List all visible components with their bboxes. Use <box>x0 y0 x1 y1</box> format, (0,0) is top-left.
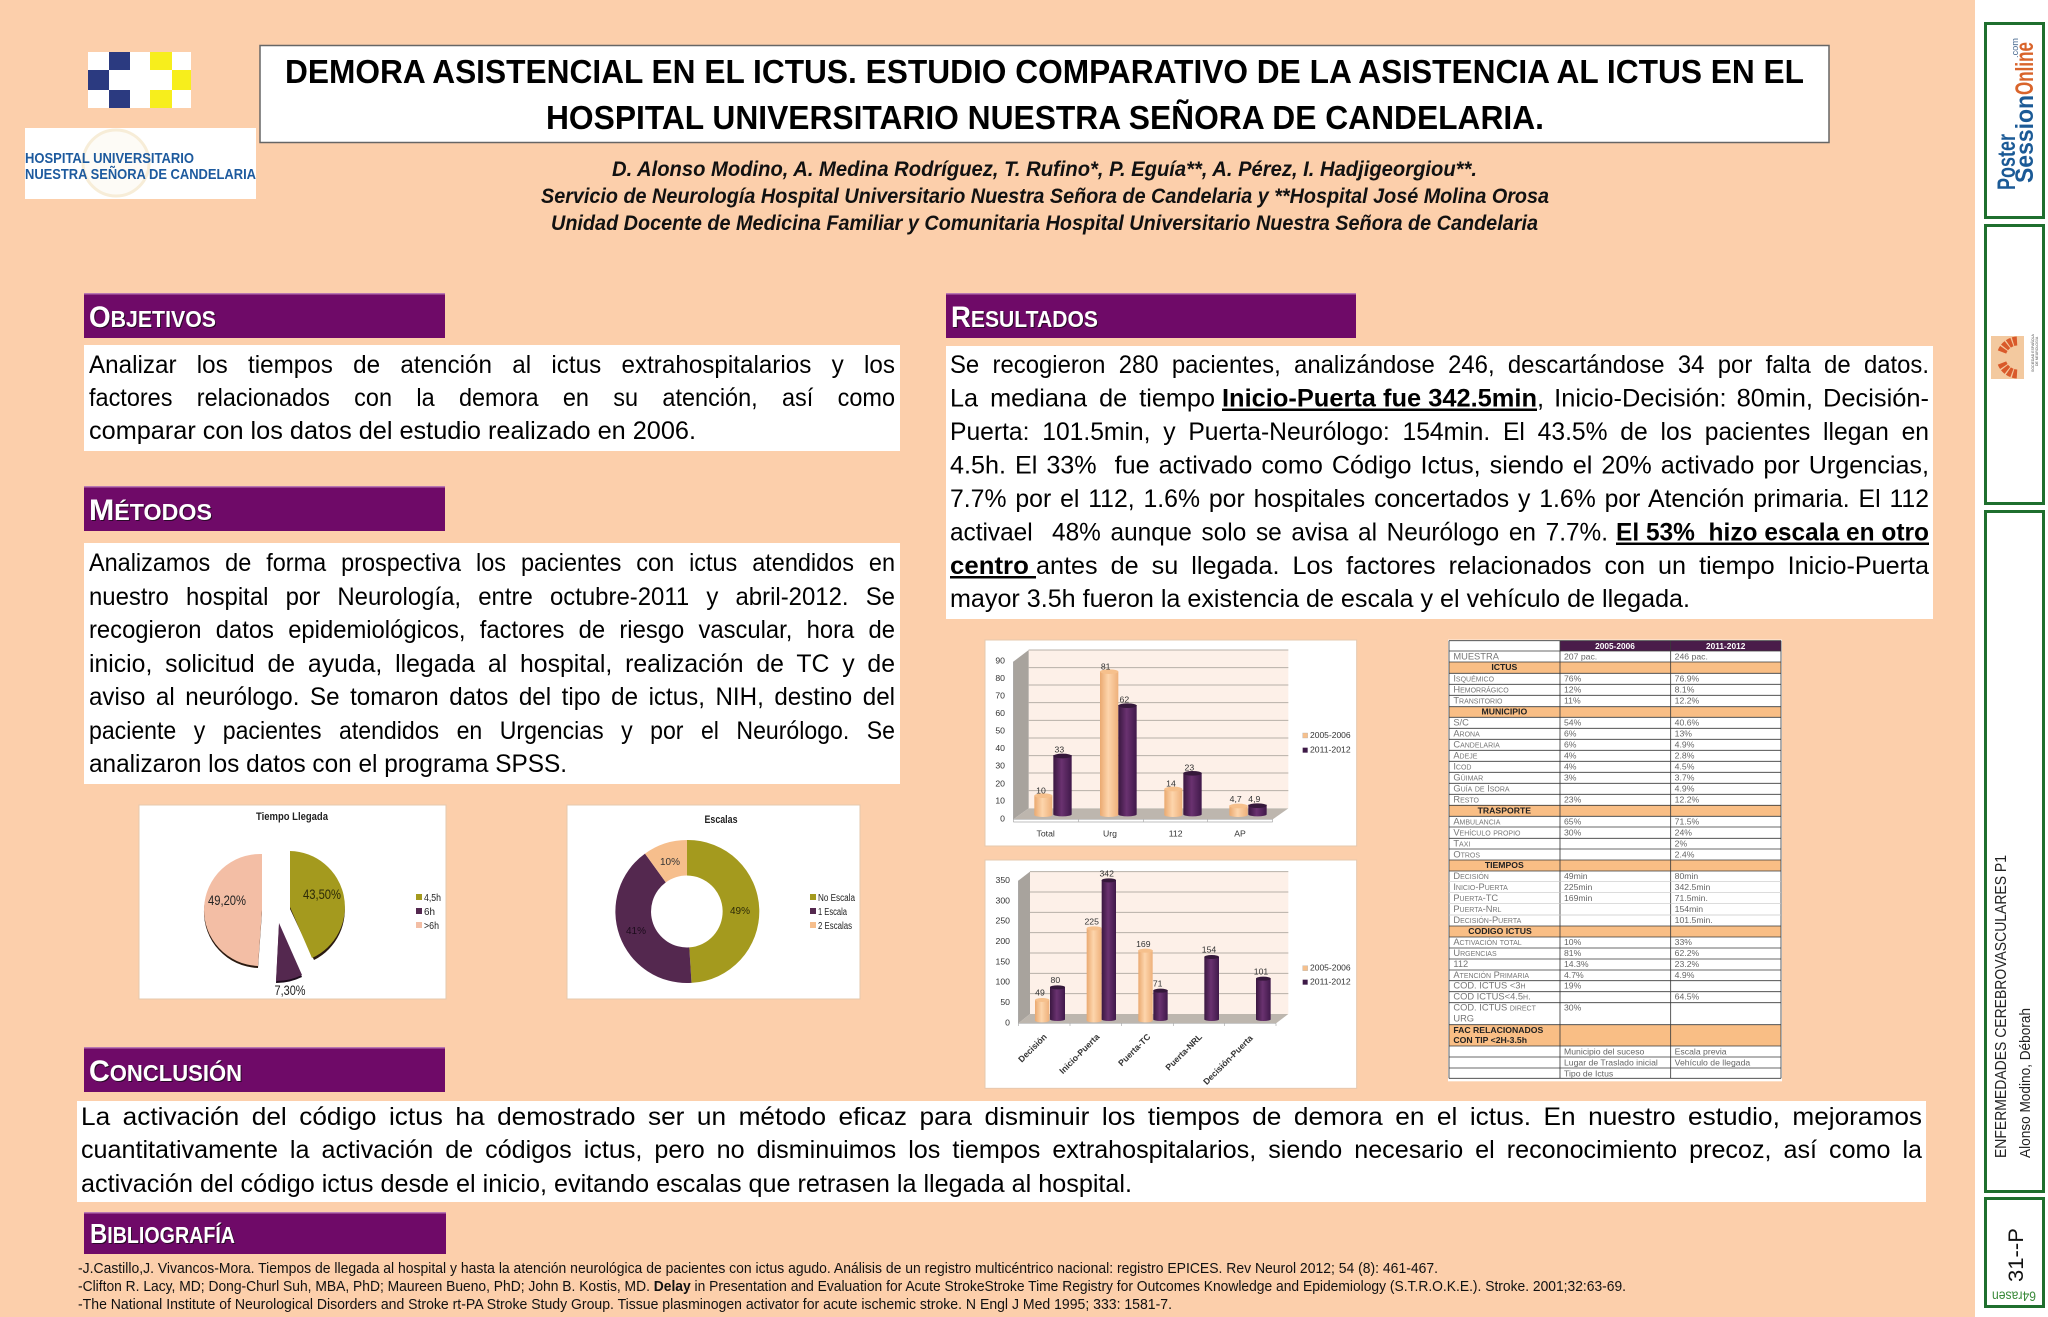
sidebar: poster session online logo: Poster <box>1993 134 2021 190</box>
sidebar: session and author <box>1986 512 2044 1192</box>
chart: codigo ictus activation bars: 30 <box>995 761 1005 771</box>
heading: bibliografia <box>84 1212 446 1254</box>
chart: codigo ictus activation bars: 0 <box>1000 813 1005 823</box>
panel: objetivos text: comparar con los datos del estudio realizado en 2006. <box>89 417 696 445</box>
table: comparison 2005-2006 vs 2011-2012: 62.2% <box>1675 948 1700 958</box>
table: comparison 2005-2006 vs 2011-2012: 4.9% <box>1675 784 1695 794</box>
table: comparison 2005-2006 vs 2011-2012: 225min <box>1564 882 1593 892</box>
table: comparison 2005-2006 vs 2011-2012: Activación total <box>1453 937 1522 947</box>
chart: tiempo llegada pie: 6h <box>424 907 435 918</box>
panel: resultados text <box>946 346 1933 619</box>
logo: hospital universitario: HOSPITAL UNIVERSITARIO <box>25 150 194 167</box>
authors and affiliations: Unidad Docente de Medicina Familiar y Comunitaria Hospital Universitario Nuestra Señora de Candelaria <box>551 212 1538 235</box>
table: comparison 2005-2006 vs 2011-2012: Decisión <box>1453 871 1489 881</box>
panel: metodos text: recogieron datos epidemiológicos, factores de riesgo vascular, hora de <box>89 616 895 644</box>
panel: conclusion text: La activación del código ictus ha demostrado ser un método eficaz para disminuir los tiempos de demora en el ictus. En nuestro estudio, mejoramos <box>81 1103 1922 1131</box>
sidebar: poster session online logo <box>1986 24 2044 218</box>
panel: resultados text: activael 48% aunque solo se avisa al Neurólogo en 7.7%. <box>950 518 1608 546</box>
chart: codigo ictus activation bars: 33 <box>1055 745 1064 755</box>
heading: metodos <box>84 486 445 531</box>
panel: objetivos text: factores relacionados con la demora en su atención, así como <box>89 384 895 412</box>
heading: resultados: RESULTADOS <box>951 301 1098 334</box>
sidebar: poster number: 31--P <box>2005 1228 2028 1282</box>
panel: objetivos text: Analizar los tiempos de atención al ictus extrahospitalarios y los <box>89 351 895 379</box>
chart: escalas donut: 2 Escalas <box>818 921 852 932</box>
table: comparison 2005-2006 vs 2011-2012: 246 pac. <box>1675 652 1708 662</box>
table: comparison 2005-2006 vs 2011-2012: 101.5min. <box>1675 915 1713 925</box>
table: comparison 2005-2006 vs 2011-2012: Urgencias <box>1453 948 1497 958</box>
panel: metodos text: Analizamos de forma prospectiva los pacientes con ictus atendidos en <box>89 549 895 577</box>
logo: checkered flag <box>88 52 191 108</box>
references: -Clifton R. Lacy, MD; Dong-Churl Suh, MBA, PhD; Maureen Bueno, PhD; John B. Kostis, MD. Delay in Presentation and Evaluation for Acute StrokeStroke Time Registry for Outcomes Knowledge and Epidemiology (S.T.R.O.K.E.). Stroke. 2001;32:63-69. <box>78 1278 1626 1295</box>
title: DEMORA ASISTENCIAL EN EL ICTUS. ESTUDIO COMPARATIVO DE LA ASISTENCIA AL ICTUS EN EL <box>285 53 1804 90</box>
panel: resultados text: Inicio-Puerta fue 342.5min <box>1222 384 1537 412</box>
heading: conclusion: CONCLUSIÓN <box>89 1055 242 1088</box>
authors and affiliations <box>541 158 1549 235</box>
table: comparison 2005-2006 vs 2011-2012: Icod <box>1453 762 1471 772</box>
chart: tiempos bars: 2011-2012 <box>1310 977 1351 987</box>
logo: hospital universitario <box>25 128 256 199</box>
table: comparison 2005-2006 vs 2011-2012 <box>1448 640 1782 1081</box>
panel: conclusion text: cuantitativamente la activación de códigos ictus, pero no disminuimos los tiempos extrahospitalarios, siendo necesario el reconocimiento precoz, así como la <box>81 1136 1922 1164</box>
chart: escalas donut: 10% <box>660 857 680 868</box>
table: comparison 2005-2006 vs 2011-2012: 24% <box>1675 827 1692 837</box>
chart: tiempo llegada pie: 7,30% <box>274 982 306 998</box>
chart: codigo ictus activation bars: Total <box>1037 829 1055 839</box>
table: comparison 2005-2006 vs 2011-2012: 3.7% <box>1675 773 1695 783</box>
table: comparison 2005-2006 vs 2011-2012: TRASPORTE <box>1478 805 1531 815</box>
chart: codigo ictus activation bars: 62 <box>1120 695 1129 705</box>
table: comparison 2005-2006 vs 2011-2012: 49min <box>1564 871 1588 881</box>
table: comparison 2005-2006 vs 2011-2012: MUNICIPIO <box>1481 707 1527 717</box>
panel: resultados text: El 53% hizo escala en otro <box>1616 518 1929 546</box>
table: comparison 2005-2006 vs 2011-2012: Tipo de Ictus <box>1564 1068 1614 1078</box>
panel: resultados text: Se recogieron 280 pacientes, analizándose 246, descartándose 34 por falta de datos. <box>950 351 1929 379</box>
panel: resultados text: Puerta: 101.5min, y Puerta-Neurólogo: 154min. El 43.5% de los pacientes llegan en <box>950 418 1929 446</box>
panel: resultados text: , Inicio-Decisión: 80min, Decisión- <box>1537 384 1929 412</box>
table: comparison 2005-2006 vs 2011-2012: Resto <box>1453 795 1480 805</box>
table: comparison 2005-2006 vs 2011-2012: 4.7% <box>1564 970 1584 980</box>
table: comparison 2005-2006 vs 2011-2012: 112 <box>1453 959 1468 969</box>
table: comparison 2005-2006 vs 2011-2012: 12.2% <box>1675 696 1700 706</box>
chart: codigo ictus activation bars: 2005-2006 <box>1310 730 1351 740</box>
chart: codigo ictus activation bars: 10 <box>995 796 1005 806</box>
table: comparison 2005-2006 vs 2011-2012: Inicio-Puerta <box>1453 882 1508 892</box>
panel: metodos text: paciente y pacientes atendidos en Urgencias y por el Neurólogo. Se <box>89 717 895 745</box>
table: comparison 2005-2006 vs 2011-2012: Ambulancia <box>1453 816 1501 826</box>
chart: tiempos bars: 225 <box>1084 916 1099 926</box>
heading: objetivos <box>84 293 445 338</box>
table: comparison 2005-2006 vs 2011-2012: 2005-2006 <box>1595 641 1635 651</box>
chart: tiempo llegada pie: Tiempo Llegada <box>256 811 329 823</box>
table: comparison 2005-2006 vs 2011-2012: 80min <box>1675 871 1698 881</box>
chart: tiempos bars: 300 <box>996 895 1010 905</box>
table: comparison 2005-2006 vs 2011-2012: 2% <box>1675 838 1687 848</box>
authors and affiliations: Servicio de Neurología Hospital Universitario Nuestra Señora de Candelaria y **Hospital José Molina Orosa <box>541 185 1549 208</box>
table: comparison 2005-2006 vs 2011-2012: Vehículo propio <box>1453 827 1521 837</box>
table: comparison 2005-2006 vs 2011-2012: COD. ICTUS direct <box>1453 1003 1537 1013</box>
table: comparison 2005-2006 vs 2011-2012: Guía de Isora <box>1453 784 1510 794</box>
panel: resultados text: antes de su llegada. Los factores relacionados con un tiempo Inicio-Puerta <box>1036 552 1929 580</box>
chart: codigo ictus activation bars: 14 <box>1166 778 1176 788</box>
table: comparison 2005-2006 vs 2011-2012: Decisión-Puerta <box>1453 915 1522 925</box>
table: comparison 2005-2006 vs 2011-2012: 2.8% <box>1675 751 1695 761</box>
chart: codigo ictus activation bars: 20 <box>995 778 1005 788</box>
table: comparison 2005-2006 vs 2011-2012: ICTUS <box>1491 662 1518 672</box>
heading: metodos: MÉTODOS <box>89 494 212 527</box>
panel: metodos text: inicio, solicitud de ayuda, llegada al hospital, realización de TC y de <box>89 650 895 678</box>
table: comparison 2005-2006 vs 2011-2012: 207 pac. <box>1564 652 1597 662</box>
chart: tiempos bars: Puerta-NRL <box>1163 1031 1205 1072</box>
panel: resultados text: 7.7% por el 112, 1.6% por hospitales concertados y 1.6% por Atención primaria. El 112 <box>950 485 1929 513</box>
chart: tiempos bars: 2005-2006 <box>1310 963 1351 973</box>
table: comparison 2005-2006 vs 2011-2012: TIEMPOS <box>1485 860 1524 870</box>
table: comparison 2005-2006 vs 2011-2012: 4% <box>1564 751 1577 761</box>
table: comparison 2005-2006 vs 2011-2012: 76% <box>1564 674 1582 684</box>
sidebar: poster number <box>1986 1198 2044 1306</box>
table: comparison 2005-2006 vs 2011-2012: S/C <box>1453 718 1469 728</box>
table: comparison 2005-2006 vs 2011-2012: 23.2% <box>1675 959 1700 969</box>
heading: conclusion <box>84 1047 445 1092</box>
chart: tiempos bars: Inicio-Puerta <box>1057 1032 1102 1076</box>
title <box>260 46 1829 142</box>
chart: escalas donut: 41% <box>626 926 646 937</box>
table: comparison 2005-2006 vs 2011-2012: Puerta-TC <box>1453 893 1498 903</box>
chart: tiempos bars: Puerta-TC <box>1116 1031 1153 1068</box>
sidebar: sociedad espanola de neurologia logo <box>1986 226 2044 504</box>
table: comparison 2005-2006 vs 2011-2012: 54% <box>1564 718 1582 728</box>
table: comparison 2005-2006 vs 2011-2012: Candelaria <box>1453 740 1500 750</box>
table: comparison 2005-2006 vs 2011-2012: 30% <box>1564 827 1582 837</box>
title: HOSPITAL UNIVERSITARIO NUESTRA SEÑORA DE CANDELARIA. <box>546 99 1544 136</box>
table: comparison 2005-2006 vs 2011-2012: 169min <box>1564 893 1593 903</box>
table: comparison 2005-2006 vs 2011-2012: Escala previa <box>1675 1046 1727 1056</box>
table: comparison 2005-2006 vs 2011-2012: 4% <box>1564 762 1577 772</box>
chart: codigo ictus activation bars: 60 <box>995 708 1005 718</box>
chart: codigo ictus activation bars: 90 <box>995 656 1005 666</box>
table: comparison 2005-2006 vs 2011-2012: URG <box>1453 1014 1474 1024</box>
table: comparison 2005-2006 vs 2011-2012: Hemorrágico <box>1453 685 1509 695</box>
chart: codigo ictus activation bars: 4,9 <box>1248 794 1261 804</box>
table: comparison 2005-2006 vs 2011-2012: Transitorio <box>1453 696 1503 706</box>
chart: codigo ictus activation bars: 40 <box>995 743 1005 753</box>
chart: codigo ictus activation bars: 112 <box>1169 829 1183 839</box>
panel: resultados text: 4.5h. El 33% fue activado como Código Ictus, siendo el 20% activado por Urgencias, <box>950 452 1929 480</box>
chart: codigo ictus activation bars: 4,7 <box>1230 794 1242 804</box>
panel: resultados text: La mediana de tiempo <box>950 384 1215 412</box>
table: comparison 2005-2006 vs 2011-2012: Lugar de Traslado inicial <box>1564 1057 1658 1067</box>
table: comparison 2005-2006 vs 2011-2012: 71.5min. <box>1675 893 1708 903</box>
sidebar: poster session online logo: Online <box>2011 42 2039 95</box>
references: -J.Castillo,J. Vivancos-Mora. Tiempos de llegada al hospital y hasta la atención neurológica de pacientes con ictus agudo. Análisis de un registro multicéntrico nacional: registro EPICES. Rev Neurol 2012; 54 (8): 461-467. <box>78 1260 1438 1277</box>
sidebar: session and author: ENFERMEDADES CEREBROVASCULARES P1 <box>1993 855 2010 1158</box>
table: comparison 2005-2006 vs 2011-2012: Atención Primaria <box>1453 970 1529 980</box>
sidebar: sociedad espanola de neurologia logo: SOCIEDAD ESPAÑOLA <box>2030 333 2035 372</box>
chart: tiempos bars: 342 <box>1099 869 1114 879</box>
chart: tiempos bars: 0 <box>1005 1017 1010 1027</box>
table: comparison 2005-2006 vs 2011-2012: Vehículo de llegada <box>1675 1057 1750 1067</box>
table: comparison 2005-2006 vs 2011-2012: 342.5min <box>1675 882 1710 892</box>
panel: resultados text: centro <box>950 552 1036 580</box>
chart: tiempos bars <box>985 860 1357 1088</box>
chart: escalas donut <box>567 805 860 999</box>
references: -The National Institute of Neurological Disorders and Stroke rt-PA Stroke Study Group. Tissue plasminogen activator for acute ischemic stroke. N Engl J Med 1995; 333: 1581-7. <box>78 1296 1172 1313</box>
table: comparison 2005-2006 vs 2011-2012: 4.9% <box>1675 970 1695 980</box>
panel: metodos text <box>84 543 900 784</box>
chart: tiempos bars: Decisión-Puerta <box>1201 1033 1255 1087</box>
table: comparison 2005-2006 vs 2011-2012: Otros <box>1453 849 1480 859</box>
chart: escalas donut: Escalas <box>704 814 738 826</box>
table: comparison 2005-2006 vs 2011-2012: 2011-2012 <box>1706 641 1746 651</box>
chart: tiempos bars: 80 <box>1051 975 1060 985</box>
chart: tiempos bars: 350 <box>996 875 1010 885</box>
chart: codigo ictus activation bars: Urg <box>1103 829 1117 839</box>
heading: bibliografia: BIBLIOGRAFÍA <box>90 1218 235 1249</box>
chart: tiempo llegada pie: 4,5h <box>424 893 441 904</box>
table: comparison 2005-2006 vs 2011-2012: 13% <box>1675 729 1692 739</box>
panel: objetivos text <box>84 345 900 451</box>
chart: tiempos bars: 200 <box>996 936 1010 946</box>
chart: tiempos bars: 50 <box>1000 997 1010 1007</box>
sidebar: poster session online logo: Session <box>2011 95 2039 183</box>
chart: codigo ictus activation bars: 50 <box>995 726 1005 736</box>
panel: metodos text: nuestro hospital por Neurología, entre octubre-2011 y abril-2012. Se <box>89 583 895 611</box>
panel: metodos text: aviso al neurólogo. Se tomaron datos del tipo de ictus, NIH, destino del <box>89 683 895 711</box>
table: comparison 2005-2006 vs 2011-2012: 12.2% <box>1675 795 1700 805</box>
sidebar: sociedad espanola de neurologia logo: DE NEUROLOGÍA <box>2035 336 2039 366</box>
table: comparison 2005-2006 vs 2011-2012: 14.3% <box>1564 959 1589 969</box>
panel: resultados text: mayor 3.5h fueron la existencia de escala y el vehículo de llegada. <box>950 585 1690 613</box>
sidebar: session and author: Alonso Modino, Déborah <box>2017 1008 2034 1158</box>
chart: tiempos bars: 169 <box>1136 939 1151 949</box>
table: comparison 2005-2006 vs 2011-2012: 10% <box>1564 937 1582 947</box>
chart: tiempos bars: 150 <box>996 956 1010 966</box>
chart: tiempo llegada pie: 43,50% <box>303 886 341 902</box>
table: comparison 2005-2006 vs 2011-2012: MUESTRA <box>1453 652 1500 662</box>
logo: hospital universitario: NUESTRA SEÑORA DE CANDELARIA <box>25 165 256 183</box>
chart: escalas donut: 49% <box>730 906 750 917</box>
table: comparison 2005-2006 vs 2011-2012: FAC RELACIONADOS <box>1453 1025 1543 1035</box>
table: comparison 2005-2006 vs 2011-2012: 23% <box>1564 795 1582 805</box>
table: comparison 2005-2006 vs 2011-2012: 40.6% <box>1675 718 1700 728</box>
chart: codigo ictus activation bars <box>985 640 1357 846</box>
table: comparison 2005-2006 vs 2011-2012: 4.9% <box>1675 740 1695 750</box>
chart: tiempos bars: 101 <box>1254 966 1268 976</box>
references <box>78 1260 1626 1313</box>
chart: tiempos bars: 154 <box>1202 945 1216 955</box>
table: comparison 2005-2006 vs 2011-2012: 154min <box>1675 904 1703 914</box>
panel: conclusion text <box>77 1101 1926 1202</box>
sidebar: poster session online logo: .com <box>2010 38 2020 58</box>
table: comparison 2005-2006 vs 2011-2012: Güimar <box>1453 773 1483 783</box>
table: comparison 2005-2006 vs 2011-2012: Puerta-Nrl <box>1453 904 1502 914</box>
table: comparison 2005-2006 vs 2011-2012: 30% <box>1564 1003 1582 1013</box>
chart: tiempos bars: Decisión <box>1016 1032 1049 1064</box>
chart: codigo ictus activation bars: 70 <box>995 691 1005 701</box>
table: comparison 2005-2006 vs 2011-2012: 2.4% <box>1675 849 1695 859</box>
chart: codigo ictus activation bars: 23 <box>1185 763 1194 773</box>
table: comparison 2005-2006 vs 2011-2012: COD. ICTUS <3h <box>1453 981 1526 991</box>
table: comparison 2005-2006 vs 2011-2012: Adeje <box>1453 751 1478 761</box>
table: comparison 2005-2006 vs 2011-2012: 11% <box>1564 696 1581 706</box>
table: comparison 2005-2006 vs 2011-2012: 76.9% <box>1675 674 1700 684</box>
table: comparison 2005-2006 vs 2011-2012: 81% <box>1564 948 1582 958</box>
chart: codigo ictus activation bars: 10 <box>1036 786 1046 796</box>
chart: codigo ictus activation bars: AP <box>1234 829 1246 839</box>
table: comparison 2005-2006 vs 2011-2012: 65% <box>1564 816 1582 826</box>
heading: resultados <box>946 293 1356 338</box>
table: comparison 2005-2006 vs 2011-2012: 6% <box>1564 729 1577 739</box>
table: comparison 2005-2006 vs 2011-2012: CON TIP <2H-3.5h <box>1453 1035 1527 1045</box>
table: comparison 2005-2006 vs 2011-2012: 19% <box>1564 981 1582 991</box>
chart: codigo ictus activation bars: 2011-2012 <box>1310 745 1351 755</box>
table: comparison 2005-2006 vs 2011-2012: Isquémico <box>1453 674 1495 684</box>
chart: tiempos bars: 250 <box>996 916 1010 926</box>
chart: codigo ictus activation bars: 80 <box>995 673 1005 683</box>
authors and affiliations: D. Alonso Modino, A. Medina Rodríguez, T. Rufino*, P. Eguía**, A. Pérez, I. Hadjigeorgiou**. <box>612 158 1477 181</box>
chart: tiempo llegada pie: 49,20% <box>208 892 246 908</box>
chart: escalas donut: No Escala <box>818 893 855 904</box>
table: comparison 2005-2006 vs 2011-2012: Municipio del suceso <box>1564 1046 1645 1056</box>
chart: tiempos bars: 100 <box>996 977 1010 987</box>
table: comparison 2005-2006 vs 2011-2012: 6% <box>1564 740 1577 750</box>
chart: codigo ictus activation bars: 81 <box>1101 662 1111 672</box>
sidebar: poster number: 64rasen <box>1992 1288 2036 1304</box>
table: comparison 2005-2006 vs 2011-2012: 3% <box>1564 773 1577 783</box>
panel: conclusion text: activación del código ictus desde el inicio, evitando escalas que retrasen la llegada al hospital. <box>81 1170 1132 1198</box>
table: comparison 2005-2006 vs 2011-2012: 4.5% <box>1675 762 1695 772</box>
table: comparison 2005-2006 vs 2011-2012: Arona <box>1453 729 1480 739</box>
chart: tiempos bars: 71 <box>1153 979 1163 989</box>
chart: tiempos bars: 49 <box>1035 987 1045 997</box>
heading: objetivos: OBJETIVOS <box>89 301 216 334</box>
panel: metodos text: analizaron los datos con el programa SPSS. <box>89 750 567 778</box>
table: comparison 2005-2006 vs 2011-2012: Taxi <box>1453 838 1470 848</box>
chart: tiempo llegada pie <box>139 805 446 999</box>
table: comparison 2005-2006 vs 2011-2012: CODIGO ICTUS <box>1468 926 1532 936</box>
table: comparison 2005-2006 vs 2011-2012: COD ICTUS<4.5h. <box>1453 992 1531 1002</box>
chart: tiempo llegada pie: >6h <box>424 921 439 932</box>
chart: escalas donut: 1 Escala <box>818 907 847 918</box>
table: comparison 2005-2006 vs 2011-2012: 12% <box>1564 685 1582 695</box>
table: comparison 2005-2006 vs 2011-2012: 33% <box>1675 937 1692 947</box>
table: comparison 2005-2006 vs 2011-2012: 8.1% <box>1675 685 1695 695</box>
table: comparison 2005-2006 vs 2011-2012: 71.5% <box>1675 816 1700 826</box>
table: comparison 2005-2006 vs 2011-2012: 64.5% <box>1675 992 1700 1002</box>
